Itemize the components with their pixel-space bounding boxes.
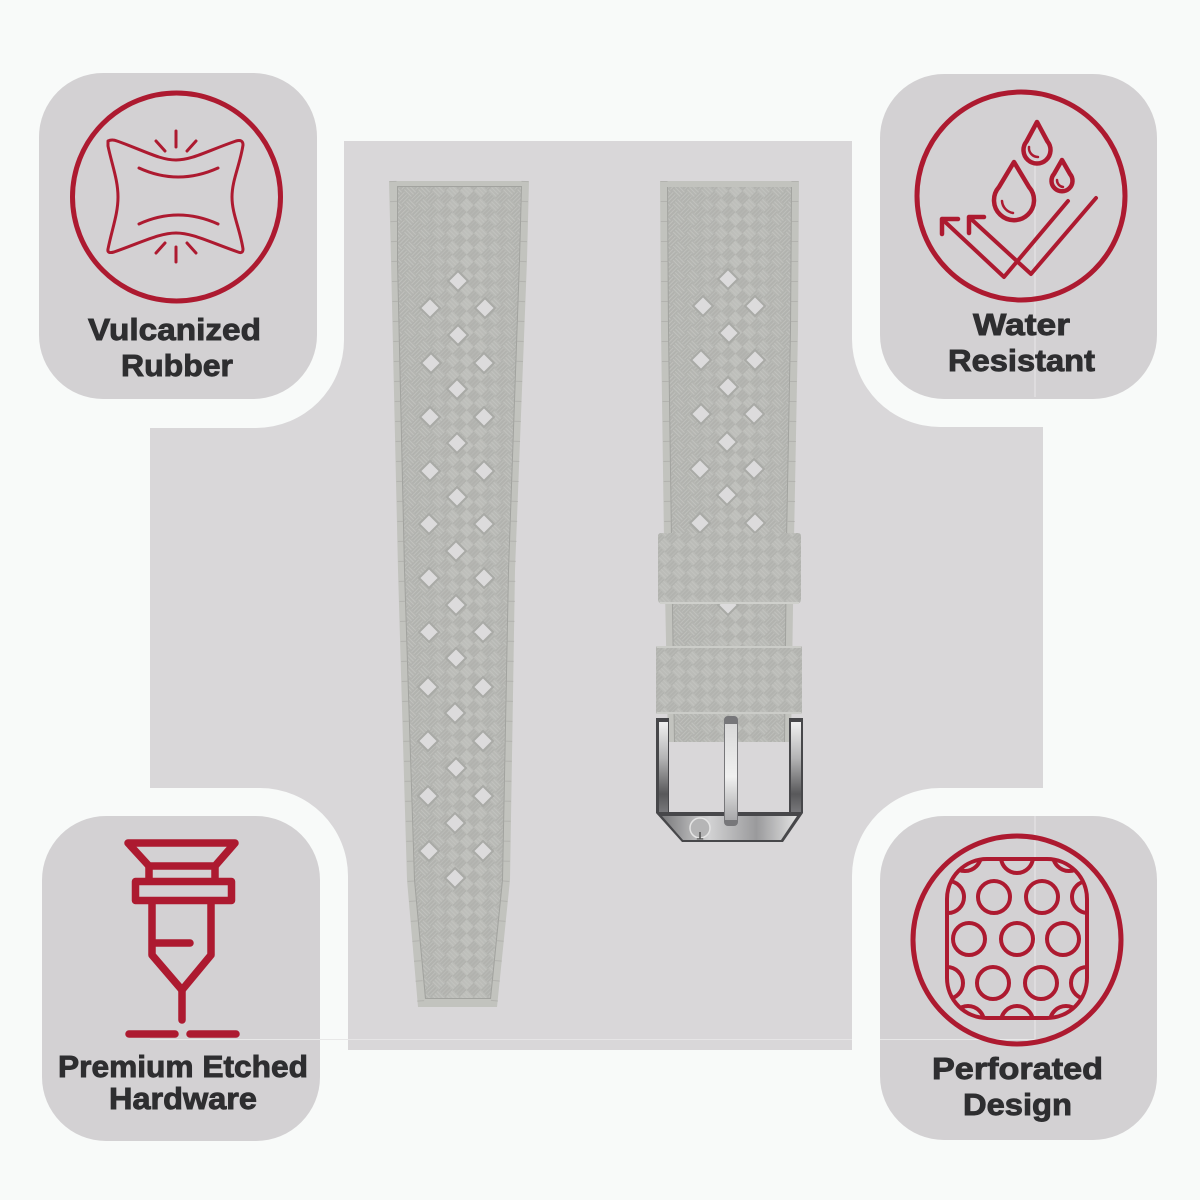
heading: vulcanized rubber (88, 312, 261, 383)
buckle (656, 716, 803, 842)
heading: water resistant (948, 307, 1095, 378)
buckle logo: T (696, 829, 703, 841)
right strap perforations (690, 269, 765, 615)
panel: vulcanized rubber (39, 73, 317, 399)
right strap with keepers and buckle (656, 181, 803, 842)
heading: perforated design: Perforated (932, 1051, 1103, 1086)
icon: stretching rubber pillow (72, 93, 280, 301)
backdrop: gray panel (150, 141, 1043, 1050)
lower keeper (656, 646, 802, 714)
heading: premium etched hardware (58, 1049, 308, 1116)
heading: water resistant: Water (973, 307, 1070, 342)
panel: water resistant (880, 74, 1157, 399)
panel: premium etched hardware (42, 816, 348, 1141)
buckle logo (690, 818, 710, 841)
heading: vulcanized rubber: Vulcanized (88, 312, 261, 347)
heading: water resistant: Resistant (948, 343, 1095, 378)
panel: perforated design (880, 816, 1157, 1140)
upper keeper (658, 533, 801, 603)
icon: water drops and arrows (917, 92, 1125, 300)
icon: perforated rubber swatch (913, 836, 1121, 1044)
right strap body (660, 181, 799, 742)
heading: perforated design (932, 1051, 1103, 1122)
heading: vulcanized rubber: Rubber (121, 348, 233, 383)
icon: laser etching nozzle (128, 843, 236, 1034)
heading: perforated design: Design (963, 1087, 1072, 1122)
heading: premium etched hardware: Premium Etched (58, 1049, 308, 1084)
heading: premium etched hardware: Hardware (109, 1081, 257, 1116)
left strap (389, 181, 529, 1007)
left strap perforations (418, 271, 495, 888)
